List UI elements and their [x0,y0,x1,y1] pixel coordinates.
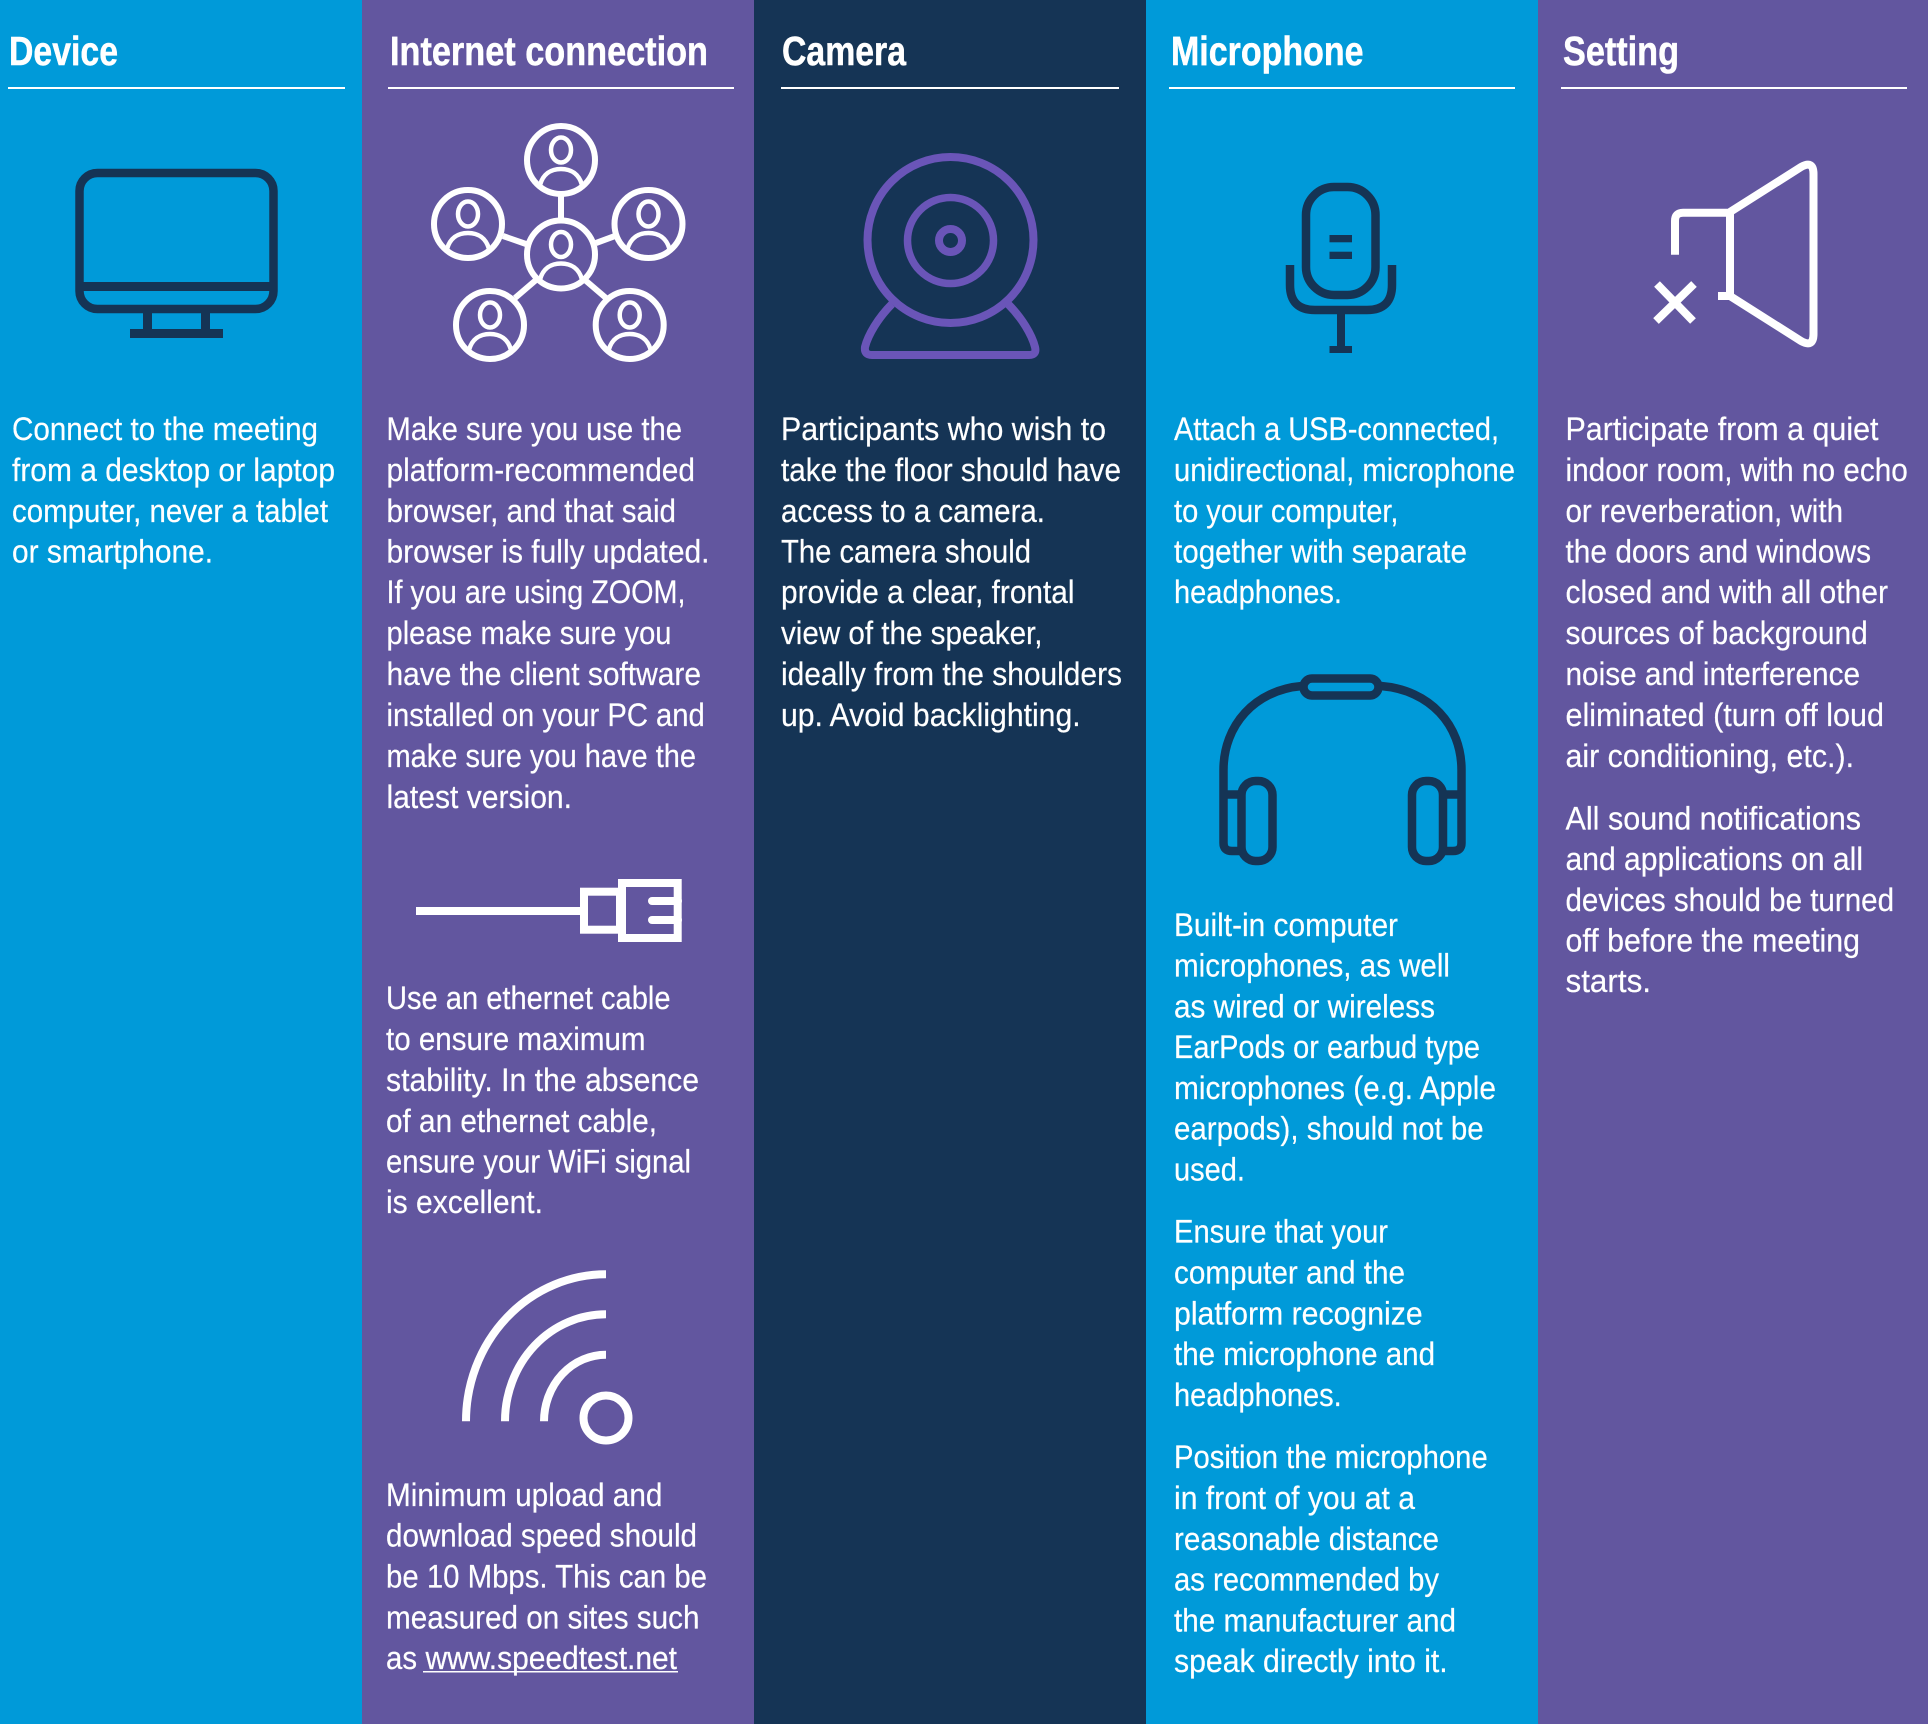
text: ethernet guidance: to ensure maximum [386,1021,646,1057]
text: quiet room guidance: eliminated (turn off loud [1566,697,1884,733]
text: microphone positioning: in front of you at a [1174,1480,1415,1516]
text: camera guidance: Participants who wish to [781,411,1106,447]
text: microphone positioning: reasonable distance [1174,1521,1439,1557]
text: built-in microphone warning: microphones, as well [1174,948,1450,984]
icon: network of people [434,126,682,359]
icon: headphones [1224,678,1462,861]
text: device guidance: Connect to the meeting [12,411,318,447]
text: camera guidance: up. Avoid backlighting. [781,697,1081,733]
text: browser guidance: make sure you have the [386,738,696,774]
text: camera guidance: take the floor should have [781,452,1121,488]
icon: webcam [865,157,1035,355]
text: ethernet guidance [386,980,699,1220]
text: browser guidance: Make sure you use the [386,411,682,447]
text: camera guidance: provide a clear, frontal [781,574,1074,610]
heading: camera: Camera [782,28,907,74]
text: camera guidance: ideally from the shoulders [781,656,1122,692]
text: connection speed guidance: measured on sites such [386,1599,700,1635]
text: recognition check [1174,1214,1435,1413]
text: quiet room guidance: air conditioning, etc.). [1566,738,1854,774]
icon: muted speaker [1656,165,1814,343]
text: recognition check: computer and the [1174,1254,1405,1290]
text: external microphone guidance: to your computer, [1174,493,1398,529]
text: external microphone guidance: Attach a USB-connected, [1174,411,1499,447]
text: connection speed guidance [386,1477,707,1676]
text: built-in microphone warning [1174,907,1496,1188]
text: camera guidance: access to a camera. [781,493,1045,529]
text: connection speed guidance: be 10 Mbps. This can be [386,1558,707,1594]
heading: setting: Setting [1563,28,1679,74]
text: notifications guidance: off before the meeting [1566,922,1860,958]
text: quiet room guidance: closed and with all other [1566,574,1888,610]
text: external microphone guidance: unidirectional, microphone [1174,452,1515,488]
text: built-in microphone warning: earpods), should not be [1174,1111,1484,1147]
panel: internet connection [362,0,754,1724]
text: notifications guidance: and applications on all [1566,841,1863,877]
text: browser guidance: If you are using ZOOM, [386,574,686,610]
text: browser guidance: browser, and that said [386,493,676,529]
text: camera guidance [781,411,1122,733]
text: browser guidance: browser is fully updated. [386,534,710,570]
text: device guidance: or smartphone. [12,534,213,570]
text: connection speed guidance: as [386,1640,417,1676]
text: ethernet guidance: stability. In the absence [386,1062,699,1098]
text: recognition check: the microphone and [1174,1336,1435,1372]
text: notifications guidance: All sound notifications [1566,800,1861,836]
text: ethernet guidance: of an ethernet cable, [386,1103,657,1139]
text: device guidance [12,411,335,570]
text: built-in microphone warning: used. [1174,1152,1245,1188]
text: device guidance: from a desktop or laptop [12,452,335,488]
panel: device [0,0,362,1724]
text: ethernet guidance: is excellent. [386,1184,543,1220]
text: built-in microphone warning: Built-in computer [1174,907,1398,943]
text: recognition check: platform recognize [1174,1296,1423,1332]
text: quiet room guidance: or reverberation, with [1566,493,1843,529]
text: browser guidance: latest version. [386,779,572,815]
text: connection speed guidance: Minimum upload and [386,1477,662,1513]
text: quiet room guidance: indoor room, with no echo [1566,452,1908,488]
text: external microphone guidance: headphones. [1174,574,1342,610]
text: recognition check: Ensure that your [1174,1214,1388,1250]
icon: wifi signal [466,1274,628,1440]
text: ethernet guidance: Use an ethernet cable [386,980,670,1016]
text: camera guidance: view of the speaker, [781,615,1042,651]
text: built-in microphone warning: microphones (e.g. Apple [1174,1070,1496,1106]
icon: desktop monitor [80,173,274,338]
text: browser guidance [386,411,710,815]
text: camera guidance: The camera should [781,534,1031,570]
panel: microphone [1146,0,1538,1724]
text: browser guidance: please make sure you [386,615,672,651]
text: connection speed guidance: www.speedtest.net [425,1640,677,1676]
text: quiet room guidance: noise and interference [1566,656,1860,692]
text: recognition check: headphones. [1174,1377,1342,1413]
text: browser guidance: installed on your PC and [386,697,705,733]
text: microphone positioning: Position the microphone [1174,1439,1488,1475]
text: microphone positioning: the manufacturer and [1174,1603,1456,1639]
text: connection speed guidance: download speed should [386,1518,697,1554]
text: notifications guidance: devices should be turned [1566,882,1894,918]
text: built-in microphone warning: as wired or wireless [1174,988,1435,1024]
text: notifications guidance [1566,800,1894,999]
text: quiet room guidance: sources of background [1566,615,1868,651]
panel: camera [754,0,1146,1724]
heading: microphone: Microphone [1171,28,1364,74]
text: device guidance: computer, never a tablet [12,493,328,529]
text: ethernet guidance: ensure your WiFi signal [386,1144,691,1180]
panel: setting [1538,0,1928,1724]
text: external microphone guidance: together with separate [1174,534,1467,570]
heading: device: Device [9,28,118,74]
text: quiet room guidance: the doors and windows [1566,534,1871,570]
heading: internet connection: Internet connection [390,28,708,74]
text: microphone positioning: speak directly into it. [1174,1643,1448,1679]
text: microphone positioning [1174,1439,1488,1679]
text: quiet room guidance [1566,411,1908,774]
text: browser guidance: have the client software [386,656,701,692]
icon: ethernet cable [416,883,678,938]
text: external microphone guidance [1174,411,1515,610]
text: browser guidance: platform-recommended [386,452,695,488]
text: notifications guidance: starts. [1566,963,1651,999]
icon: microphone [1290,187,1392,353]
text: microphone positioning: as recommended by [1174,1562,1439,1598]
text: built-in microphone warning: EarPods or earbud type [1174,1029,1480,1065]
text: quiet room guidance: Participate from a quiet [1566,411,1879,447]
